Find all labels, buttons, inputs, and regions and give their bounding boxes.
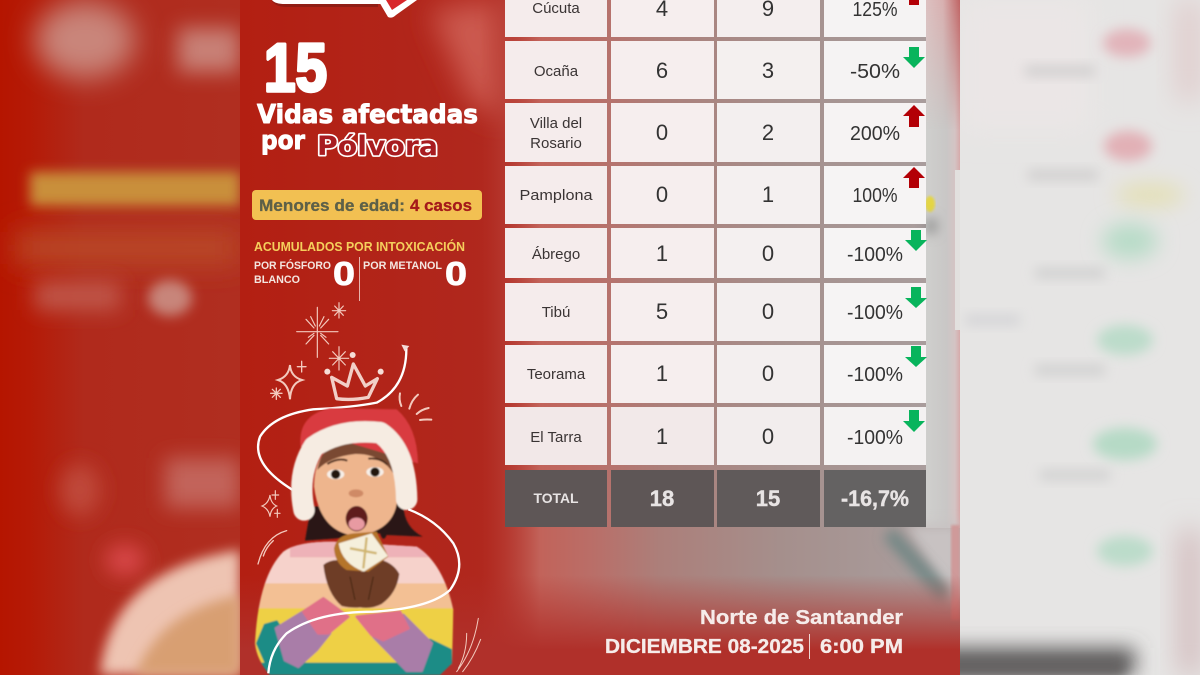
row: Pamplona: [505, 166, 926, 224]
footer: place and date: DICIEMBRE 08-2025: [605, 636, 804, 658]
row: Ábrego: 0: [762, 241, 774, 266]
row: Ábrego: Ábrego: [532, 246, 580, 263]
row: Villa del Rosario: 0: [656, 120, 668, 145]
row: TOTAL: TOTAL: [534, 491, 578, 506]
child: sweater: [250, 540, 460, 675]
panel: central red background: [240, 0, 960, 675]
panel: blurred left background: [0, 0, 240, 675]
footer: place and date: Norte de Santander: [700, 607, 903, 629]
row: TOTAL: 15: [756, 486, 780, 511]
row: TOTAL: [505, 470, 926, 527]
row: Ocaña: 3: [762, 58, 774, 83]
doodle: white swirl behind child: [258, 348, 406, 489]
row: Tibú: -100%: [847, 301, 903, 324]
row: El Tarra: 0: [762, 424, 774, 449]
footer: place and date: 6:00 PM: [820, 636, 903, 658]
row: Villa del Rosario: 2: [762, 120, 774, 145]
row: Pamplona: 0: [656, 182, 668, 207]
row: Ocaña: [505, 41, 926, 99]
block: acumulados por intoxicación: 0: [333, 255, 355, 292]
row: Ocaña: -50%: [850, 60, 900, 83]
doodle: crown: [324, 352, 384, 399]
row: Cúcuta: [505, 0, 926, 37]
row: Teorama: Teorama: [527, 366, 586, 383]
row: El Tarra: [505, 407, 926, 465]
row: Ábrego: [505, 228, 927, 278]
logo fragment at top: [272, 0, 417, 18]
doodle: white swirl front: [268, 509, 459, 673]
row: Villa del Rosario: Villa del: [530, 115, 582, 132]
row: Teorama: [505, 345, 927, 403]
illustration: child with gift and doodles: [250, 303, 481, 675]
badge: Menores de edad: Menores de edad:: [259, 196, 405, 215]
heading: Vidas afectadas por Pólvora: por: [261, 126, 305, 156]
row: El Tarra: -100%: [847, 426, 903, 449]
row: Tibú: 5: [656, 299, 668, 324]
child: santa hat: [300, 408, 418, 463]
child: face: [314, 440, 397, 536]
row: Ocaña: 6: [656, 58, 668, 83]
badge: Menores de edad: [252, 190, 482, 220]
row: Tibú: [505, 283, 927, 341]
child: hair: [305, 503, 423, 541]
row: Teorama: -100%: [847, 363, 903, 386]
row: Villa del Rosario: 200%: [850, 122, 900, 145]
child: sleeves: [257, 598, 451, 671]
heading: Vidas afectadas por Pólvora: Pólvora: [317, 131, 438, 162]
row: Ábrego: 1: [656, 241, 668, 266]
row: Pamplona: 1: [762, 182, 774, 207]
row: Tibú: Tibú: [542, 304, 570, 321]
row: TOTAL: 18: [650, 486, 674, 511]
row: Cúcuta: Cúcuta: [532, 0, 580, 17]
child photo shapes: [250, 408, 460, 675]
heading: Vidas afectadas por Pólvora: [257, 100, 478, 162]
row: El Tarra: El Tarra: [530, 429, 582, 446]
footer: place and date: [605, 607, 903, 659]
heading: Vidas afectadas por Pólvora: Vidas afectadas: [257, 100, 478, 130]
row: Teorama: 0: [762, 361, 774, 386]
row: Teorama: 1: [656, 361, 668, 386]
row: Ocaña: Ocaña: [534, 63, 579, 80]
row: El Tarra: 1: [656, 424, 668, 449]
row: Villa del Rosario: [505, 103, 926, 162]
row: Tibú: 0: [762, 299, 774, 324]
row: Pamplona: Pamplona: [520, 187, 593, 204]
child: hands: [323, 559, 399, 608]
block: acumulados por intoxicación: ACUMULADOS POR INTOXICACIÓN: [254, 239, 465, 254]
block: acumulados por intoxicación: BLANCO: [254, 274, 300, 286]
row: Pamplona: 100%: [852, 184, 898, 207]
block: acumulados por intoxicación: [254, 239, 467, 301]
big number 15: 15: [264, 30, 327, 106]
block: acumulados por intoxicación: POR FÓSFORO: [254, 259, 331, 272]
panel: blurred right background: [960, 0, 1200, 675]
child: gift: [334, 532, 388, 572]
table: cases by municipality: [505, 0, 927, 527]
doodle: fireworks and stars: [258, 303, 481, 672]
row: TOTAL: -16,7%: [841, 486, 909, 511]
block: acumulados por intoxicación: 0: [445, 255, 467, 292]
row: Ábrego: -100%: [847, 243, 903, 266]
row: Villa del Rosario: Rosario: [530, 135, 582, 152]
block: acumulados por intoxicación: POR METANOL: [363, 260, 442, 272]
badge: Menores de edad: 4 casos: [410, 196, 472, 215]
